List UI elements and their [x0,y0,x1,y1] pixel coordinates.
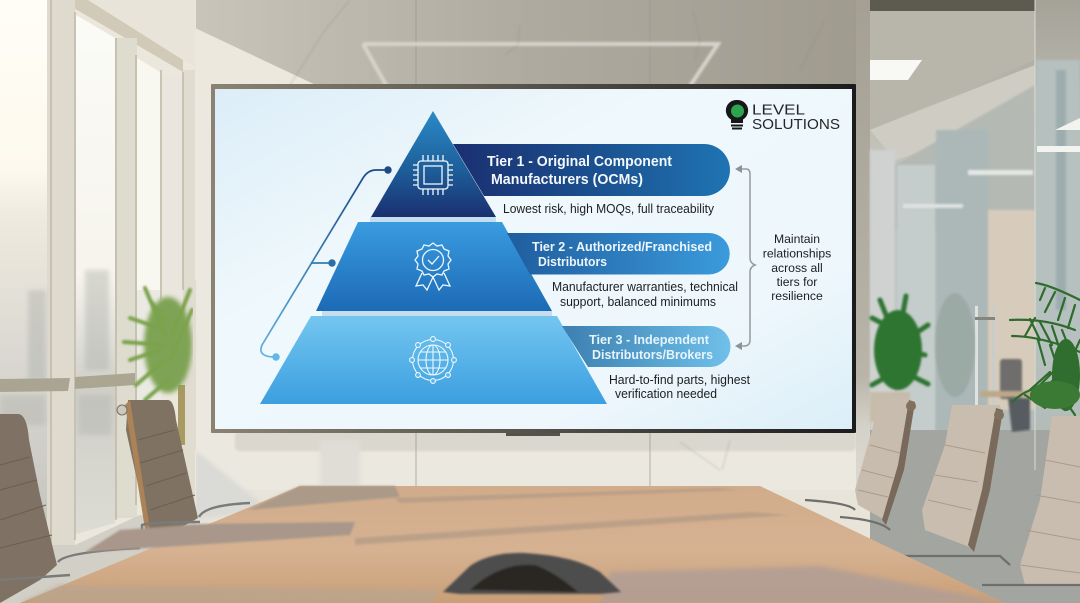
monitor [211,84,856,436]
tier 3 description: verification needed [615,387,717,401]
background: glass offices at right [870,0,1080,603]
tier 3 description [609,373,751,401]
tier 2 banner: Distributors [538,254,607,269]
plant by window [124,280,196,450]
side note: Maintain [774,232,820,246]
wooden table [20,486,1005,603]
tier 3 description: Hard-to-find parts, highest [609,373,751,387]
icon: ribbon badge [415,243,451,290]
tier 2 description: support, balanced minimums [560,295,716,309]
tier 1 banner: Manufacturers (OCMs) [491,172,643,188]
blurred plant behind glass [870,293,975,422]
side note: resilience [771,289,823,303]
background: window wall at left [0,0,196,603]
side note: relationships [763,246,831,260]
background: conference room wall [190,0,880,520]
logo [726,100,840,133]
tier 1 description: Lowest risk, high MOQs, full traceability [503,202,715,216]
pyramid tier 3 [260,316,607,404]
connector line with dots [261,166,392,361]
icon: microchip [413,155,453,195]
icon: globe network [410,337,456,383]
pyramid tier 2 [316,222,552,311]
bracket with double arrows [735,165,755,350]
tier 2 banner: Tier 2 - Authorized/Franchised [532,239,712,254]
side note: tiers for [777,275,817,289]
tier 1 banner: Tier 1 - Original Component [487,154,672,170]
tier 2 description [552,280,738,309]
tier 2 banner [507,233,730,274]
tier 3 banner [562,326,730,367]
tier 2 description: Manufacturer warranties, technical [552,280,738,294]
tier 3 banner: Distributors/Brokers [592,347,713,362]
tier 3 banner: Tier 3 - Independent [589,332,710,347]
conference speakerphone [443,553,621,594]
pyramid tier 1 [371,111,496,217]
monitor screen [215,89,852,429]
left chairs [0,400,250,603]
icon: light bulb [726,100,748,130]
palm plant at right [1010,283,1080,415]
pyramid gaps [322,217,552,316]
logo: SOLUTIONS [752,116,840,133]
side note: across all [771,261,823,275]
right chairs [805,398,1080,585]
side note [763,232,831,303]
tier 1 banner [453,144,730,196]
logo: LEVEL [752,102,805,118]
monitor frame [211,84,856,433]
